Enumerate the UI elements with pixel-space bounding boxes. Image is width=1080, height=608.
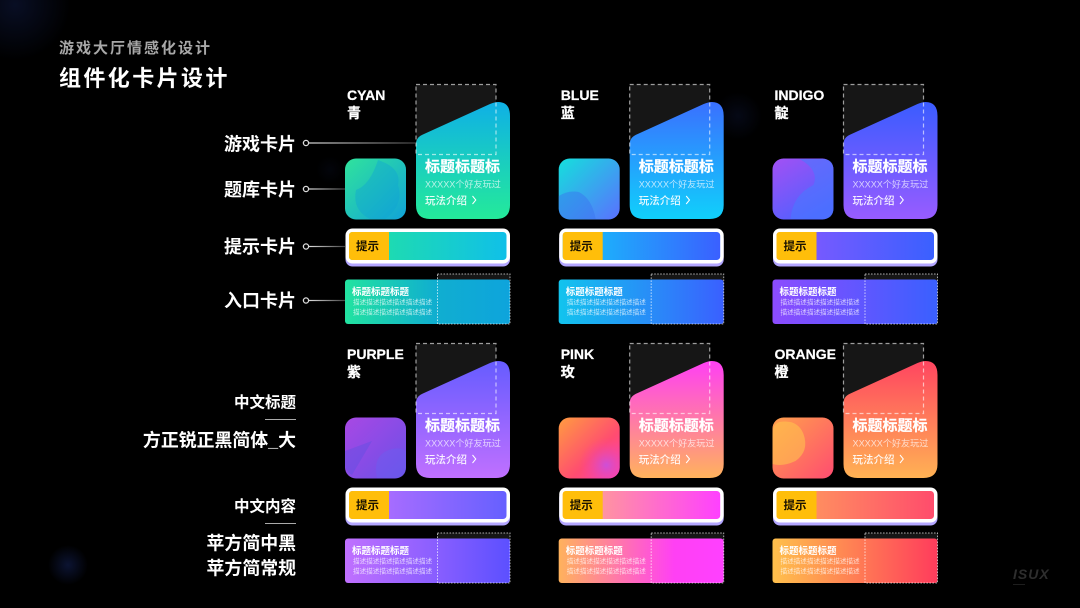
entry card: 描述描述描述描述描述描述 — [567, 556, 646, 566]
entry card — [772, 274, 938, 324]
hint card: 提示 — [570, 498, 593, 512]
main title: 组件化卡片设计 — [59, 66, 230, 91]
colour name: PINK — [561, 346, 594, 362]
entry card: 描述描述描述描述描述描述 — [780, 298, 860, 306]
entry card: 标题标题标题 — [566, 545, 623, 557]
game card: 玩法介绍 — [425, 453, 467, 466]
panel: blue — [559, 84, 724, 324]
quiz tile — [772, 418, 834, 478]
quiz tile — [345, 418, 406, 478]
label: hint card: 提示卡片 — [224, 236, 296, 257]
game card: 标题标题标 — [425, 158, 500, 176]
game card: 玩法介绍 — [639, 453, 681, 466]
hint card — [346, 488, 510, 526]
entry card: 标题标题标题 — [780, 286, 837, 298]
hint card: 提示 — [784, 239, 806, 253]
entry card: 描述描述描述描述描述描述 — [567, 566, 646, 576]
font notes — [143, 392, 296, 578]
entry card — [559, 533, 724, 583]
entry card — [559, 274, 724, 324]
entry card — [345, 274, 510, 324]
hint card: 提示 — [356, 498, 379, 512]
label: entry card — [224, 291, 345, 311]
entry card: 标题标题标题 — [352, 545, 410, 557]
hint card: 提示 — [356, 239, 379, 253]
game card — [630, 344, 724, 478]
game card: 玩法介绍 — [639, 194, 681, 207]
colour name: PURPLE — [347, 346, 404, 362]
game card: XXXXX个好友玩过 — [425, 178, 501, 190]
entry card: 描述描述描述描述描述描述 — [567, 298, 646, 306]
colour name: 靛 — [774, 105, 788, 121]
quiz tile — [345, 158, 406, 220]
note: body font: 中文内容 — [234, 496, 296, 516]
note: heading font — [143, 392, 296, 450]
game card — [844, 84, 938, 219]
game card — [844, 344, 938, 478]
panel: purple — [345, 344, 510, 583]
colour name: 青 — [347, 105, 361, 121]
hint card: 提示 — [570, 239, 593, 253]
game card — [416, 344, 510, 478]
ISUX logo: ISUX — [1013, 566, 1050, 582]
entry card — [345, 533, 510, 583]
colour name: INDIGO — [774, 87, 824, 103]
game card: 标题标题标 — [639, 418, 714, 434]
hint card — [773, 228, 938, 266]
game card: XXXXX个好友玩过 — [639, 438, 714, 448]
entry card: 描述描述描述描述描述描述 — [780, 308, 860, 316]
subtitle: 游戏大厅情感化设计 — [59, 39, 212, 57]
colour name: CYAN — [347, 87, 385, 103]
note: body font: 苹方简常规 — [207, 558, 296, 578]
panel: pink — [559, 344, 724, 583]
quiz tile — [559, 418, 620, 478]
entry card: 描述描述描述描述描述描述 — [353, 298, 433, 306]
entry card: 描述描述描述描述描述描述 — [780, 566, 860, 576]
game card: XXXXX个好友玩过 — [425, 438, 501, 448]
quiz tile — [559, 158, 620, 220]
game card: 标题标题标 — [425, 418, 500, 434]
entry card: 标题标题标题 — [566, 286, 623, 298]
entry card: 标题标题标题 — [780, 545, 837, 557]
entry card: 标题标题标题 — [352, 286, 410, 298]
colour name: 蓝 — [561, 105, 575, 121]
note: heading font: 中文标题 — [234, 392, 296, 412]
label: quiz card: 题库卡片 — [224, 180, 296, 200]
panel: indigo — [772, 84, 938, 324]
entry card: 描述描述描述描述描述描述 — [353, 566, 433, 576]
entry card: 描述描述描述描述描述描述 — [353, 308, 433, 316]
game card — [630, 84, 724, 219]
hint card: 提示 — [784, 498, 806, 512]
note: heading font: 方正锐正黑简体_大 — [143, 430, 296, 450]
note: body font — [207, 496, 296, 578]
colour name: 橙 — [774, 364, 788, 380]
hint card — [773, 488, 938, 526]
label: entry card: 入口卡片 — [224, 291, 296, 311]
game card: 标题标题标 — [852, 158, 928, 176]
label: game card — [224, 134, 415, 154]
entry card — [772, 533, 938, 583]
panel: cyan — [345, 84, 510, 324]
game card: 标题标题标 — [639, 158, 714, 176]
entry card: 描述描述描述描述描述描述 — [780, 556, 860, 566]
row labels: card types — [224, 134, 415, 311]
label: quiz card — [224, 180, 345, 200]
hint card — [559, 488, 724, 526]
quiz tile — [772, 158, 834, 220]
title block — [59, 39, 230, 91]
label: game card: 游戏卡片 — [224, 134, 296, 154]
hint card — [559, 228, 724, 266]
game card: XXXXX个好友玩过 — [639, 178, 714, 190]
game card: XXXXX个好友玩过 — [852, 178, 928, 190]
panel: orange — [772, 344, 938, 583]
game card: 玩法介绍 — [425, 194, 467, 207]
game card: 玩法介绍 — [852, 453, 894, 466]
colour name: 玫 — [561, 364, 575, 380]
colour name: BLUE — [561, 87, 599, 103]
note: body font: 苹方简中黑 — [207, 532, 296, 554]
colour name: ORANGE — [774, 346, 836, 362]
game card: 标题标题标 — [852, 418, 928, 434]
game card — [416, 84, 510, 219]
hint card — [346, 228, 510, 266]
game card: 玩法介绍 — [852, 194, 894, 207]
entry card: 描述描述描述描述描述描述 — [353, 556, 433, 566]
entry card: 描述描述描述描述描述描述 — [567, 308, 646, 316]
game card: XXXXX个好友玩过 — [852, 438, 928, 448]
label: hint card — [224, 236, 345, 257]
colour name: 紫 — [347, 364, 361, 380]
